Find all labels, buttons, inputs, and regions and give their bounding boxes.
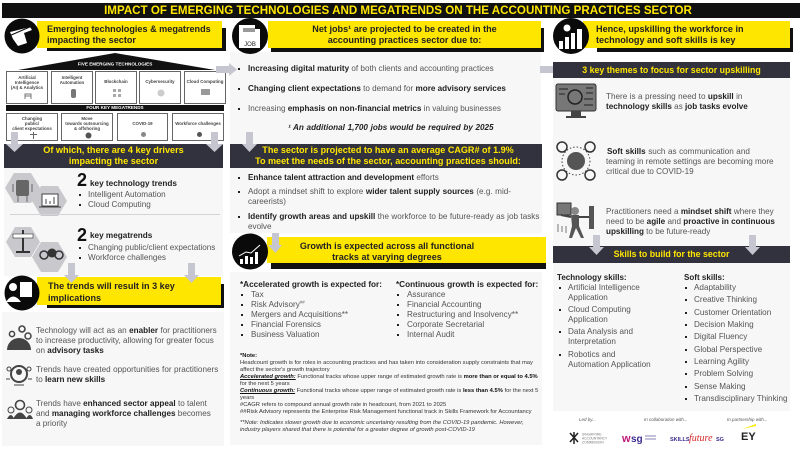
- header: net jobs: Net jobs¹ are projected to be created in the: [312, 24, 497, 34]
- logo: EY: [741, 424, 756, 443]
- technology boxes: (AI) & Analytics: [11, 85, 43, 90]
- arrow: down to growth: [268, 233, 282, 253]
- banner: 3 key themes: [553, 62, 790, 78]
- growth lists: *Accelerated growth is expected for:: [240, 280, 382, 289]
- logo: SkillsFuture SG: SG: [716, 437, 724, 443]
- footer: partner logos: [570, 417, 768, 445]
- growth lists: Risk Advisory##: [251, 299, 305, 309]
- technology boxes: Intelligence: [15, 80, 39, 85]
- action list: Enhance talent attraction and development efforts: [248, 173, 439, 182]
- implications list: a priority: [36, 419, 67, 428]
- technology boxes: Artificial: [18, 75, 36, 80]
- icon: gauge and gears: [7, 325, 32, 350]
- technology boxes: Automation: [60, 80, 84, 85]
- soft skills list: Global Perspective: [694, 345, 762, 354]
- net jobs reasons: Increasing emphasis on non-financial metrics in valuing businesses: [248, 104, 501, 113]
- footer: partner logos: Led by...: [579, 417, 596, 422]
- icon: learner: [6, 365, 32, 386]
- header: 3 key implications: implications: [48, 292, 101, 302]
- panel: left background: [4, 168, 223, 276]
- growth lists: Financial Accounting: [407, 300, 482, 309]
- implications list: [6, 325, 218, 428]
- text: technology upskilling: technology skills as job tasks evolve: [606, 102, 748, 111]
- text: 2 key megatrends: key megatrends: [90, 231, 152, 240]
- megatrend boxes: COVID-19: [132, 121, 153, 126]
- megatrend boxes: & offshoring: [74, 126, 100, 131]
- header: 3 key implications: The trends will result in 3 key: [48, 281, 175, 291]
- technology skills list: Application: [568, 315, 608, 324]
- bar: four key megatrends: FOUR KEY MEGATRENDS: [86, 105, 144, 110]
- footer: partner logos: In partnership with...: [727, 417, 768, 422]
- header: upskilling: technology and soft skills is key: [596, 35, 735, 45]
- technology skills list: Artificial Intelligence: [568, 283, 640, 292]
- header: emerging technologies: Emerging technologies & megatrends: [47, 24, 211, 34]
- logo: WSG: [621, 433, 656, 445]
- note text: **Note: Indicates slower growth due to economic uncertainty resulting from the COVID-19 pandemic. However,: [240, 420, 524, 426]
- text: technology upskilling: [606, 92, 748, 111]
- text: mindset shift: need to be agile and proactive in continuous: [606, 217, 775, 226]
- logo: WSG: sg: [631, 434, 643, 445]
- text: 2 key megatrends: [77, 225, 215, 262]
- action list: evolve: [248, 222, 272, 231]
- megatrend boxes: client expectations: [12, 126, 52, 131]
- icon: monitor: [556, 84, 596, 118]
- banner: CAGR: To meet the needs of the sector, accounting practices should:: [255, 156, 521, 166]
- banner: CAGR: [230, 144, 542, 168]
- header: growth: tracks at varying degrees: [332, 252, 442, 262]
- soft skills list: Transdisciplinary Thinking: [694, 394, 787, 403]
- note text: Continuous growth: Functional tracks whose upper range of estimated growth rate is less than 4.5% for the next 5: [240, 388, 538, 394]
- panel: net jobs background: [230, 52, 541, 144]
- arrows: down to skills: [589, 235, 760, 255]
- header: net jobs: accounting practices sector due to:: [328, 35, 481, 45]
- soft skills list: [684, 273, 787, 403]
- logo: SkillsFuture SG: SKILLS: [670, 437, 690, 443]
- technology boxes: Cloud Computing: [187, 79, 223, 84]
- megatrend boxes: towards outsourcing: [65, 121, 109, 126]
- growth lists: Restructuring and Insolvency**: [407, 310, 518, 319]
- growth lists: Corporate Secretarial: [407, 320, 484, 329]
- action list: careerists): [248, 197, 286, 206]
- implications list: Trends have created opportunities for practitioners: [36, 365, 218, 374]
- text: 2 key megatrends: 2: [77, 225, 87, 245]
- net jobs reasons: [238, 64, 506, 132]
- footer: partner logos: In collaboration with...: [644, 417, 688, 422]
- text: mindset shift: upskilling to be future-ready: [606, 227, 710, 236]
- technology skills list: [557, 273, 651, 369]
- note text: Accelerated growth: Functional tracks whose upper range of estimated growth rate is more than or equal to 4.5%: [240, 374, 538, 380]
- banner: skills to build: Skills to build for the sector: [614, 249, 729, 259]
- technology boxes: Intelligent: [62, 75, 82, 80]
- action list: Identify growth areas and upskill the workforce to be future-ready as job tasks: [248, 212, 539, 221]
- text: mindset shift: Practitioners need a mindset shift where they: [606, 207, 774, 216]
- net jobs reasons: Increasing digital maturity of both clients and accounting practices: [248, 64, 494, 73]
- panel: growth background: [230, 272, 542, 445]
- text: soft skills: Soft skills such as communication and: [607, 147, 750, 156]
- logo: SkillsFuture SG: future: [689, 433, 713, 444]
- logo: WSG: w: [621, 433, 631, 445]
- technology skills list: Cloud Computing: [568, 305, 631, 314]
- banner: CAGR: The sector is projected to have an average CAGR# of 1.9%: [262, 145, 514, 155]
- soft skills list: Soft skills:: [684, 273, 725, 282]
- icon: signpost and people hexagons: [6, 227, 67, 272]
- soft skills list: Problem Solving: [694, 369, 753, 378]
- logo: SkillsFuture SG: [670, 433, 724, 444]
- header: 3 key implications: [4, 276, 224, 310]
- banner: 4 key drivers: [4, 144, 223, 168]
- roof: five emerging technologies: [18, 53, 215, 70]
- logo: Singapore Accountancy Commission: COMMISSION: [582, 440, 604, 444]
- soft skills list: Learning Agility: [694, 357, 749, 366]
- note text: #CAGR refers to compound annual growth rate in headcount, from 2021 to 2025: [240, 402, 446, 408]
- action list: Adopt a mindset shift to explore wider talent supply sources (e.g. mid-: [248, 187, 511, 196]
- text: 2 key technology trends: 2: [77, 170, 87, 190]
- banner: skills to build: [553, 246, 790, 263]
- header: growth: Growth is expected across all functional: [300, 241, 474, 251]
- arrow: down to CAGR: [242, 132, 257, 152]
- growth lists: Business Valuation: [251, 330, 320, 339]
- text: soft skills: critical due to COVID-19: [606, 167, 694, 176]
- implications list: to learn new skills: [36, 375, 105, 384]
- growth lists: Assurance: [407, 290, 445, 299]
- text: 2 key technology trends: Cloud Computing: [88, 200, 151, 209]
- title bar: IMPACT OF EMERGING TECHNOLOGIES AND MEGATRENDS ON THE ACCOUNTING PRACTICES SECTOR: [104, 4, 692, 17]
- banner: 4 key drivers: Of which, there are 4 key drivers: [43, 145, 184, 155]
- header: net jobs: [232, 18, 544, 54]
- icon: global team: [556, 141, 596, 181]
- implications list: on advisory tasks: [36, 346, 104, 355]
- banner: 3 key themes: 3 key themes to focus for sector upskilling: [582, 65, 761, 75]
- header: growth: [232, 234, 546, 270]
- growth lists: Financial Forensics: [251, 320, 321, 329]
- soft skills list: Sense Making: [694, 382, 746, 391]
- note text: *Note:: [240, 353, 257, 359]
- technology skills list: Data Analysis and: [568, 327, 633, 336]
- note text: affect the sector's growth trajectory: [240, 367, 330, 373]
- soft skills list: Adaptability: [694, 283, 736, 292]
- logo: Singapore Accountancy Commission: [570, 432, 608, 444]
- arrow: middle to right: [540, 66, 553, 73]
- growth lists: Internal Audit: [407, 330, 454, 339]
- text: soft skills: teaming in remote settings are becoming more: [606, 157, 774, 166]
- technology skills list: Robotics and: [568, 350, 615, 359]
- implications list: and managing workforce challenges becomes: [36, 409, 211, 418]
- title bar: [2, 3, 800, 18]
- growth lists: *Continuous growth is expected for:: [396, 280, 538, 289]
- text: mindset shift: [606, 207, 775, 236]
- arrows: down to implications: [64, 263, 199, 283]
- note text: [240, 353, 538, 433]
- panel: skills background: [553, 263, 790, 411]
- bar: four key megatrends: [6, 105, 224, 111]
- implications list: to increase productivity, allowing for greater focus: [36, 336, 214, 345]
- header: upskilling: Hence, upskilling the workforce in: [596, 24, 744, 34]
- text: 2 key technology trends: [77, 170, 177, 209]
- note text: industry players shared that there is potential for a greater degree of growth post-COVID-19: [240, 427, 475, 433]
- icon: robot and laptop hexagons: [5, 173, 67, 216]
- action list: [238, 173, 540, 231]
- megatrend boxes: [6, 113, 224, 141]
- arrow: left to middle: [216, 63, 237, 76]
- panel: implications background: [2, 312, 224, 446]
- text: 2 key megatrends: Workforce challenges: [88, 253, 166, 262]
- note text: ##Risk Advisory represents the Enterprise Risk Management functional track in Skills Framework for Accountancy: [240, 409, 532, 415]
- text: 2 key megatrends: Changing public/client expectations: [88, 243, 215, 252]
- text: soft skills: [606, 147, 774, 176]
- technology skills list: Interpretation: [568, 337, 616, 346]
- panel: themes background: [553, 78, 790, 246]
- technology boxes: Blockchain: [104, 79, 128, 84]
- technology boxes: Cybersecurity: [145, 79, 175, 84]
- roof: five emerging technologies: FIVE EMERGING TECHNOLOGIES: [78, 62, 152, 66]
- megatrend boxes: Changing: [22, 116, 42, 121]
- text: 2 key technology trends: key technology trends: [90, 179, 177, 188]
- technology skills list: Automation Application: [568, 360, 651, 369]
- icon: practitioner with book and pencil: [556, 202, 594, 238]
- panel: actions background: [230, 168, 542, 233]
- growth lists: [240, 280, 538, 339]
- net jobs reasons: Changing client expectations to demand for more advisory services: [248, 84, 506, 93]
- soft skills list: Digital Fluency: [694, 332, 747, 341]
- logo: Singapore Accountancy Commission: ACCOUNTANCY: [582, 436, 608, 440]
- logo: EY: EY: [741, 431, 756, 443]
- technology skills list: Application: [568, 293, 608, 302]
- net jobs reasons: ¹ An additional 1,700 jobs would be required by 2025: [288, 123, 494, 132]
- header: emerging technologies: [4, 18, 226, 54]
- arrows: down to drivers: [6, 132, 223, 152]
- megatrend boxes: Move: [81, 116, 93, 121]
- note text: years: [240, 395, 254, 401]
- header: net jobs: JOB: [244, 42, 256, 48]
- technology boxes: [6, 71, 226, 104]
- technology skills list: Technology skills:: [557, 273, 627, 282]
- header: upskilling: [553, 18, 793, 54]
- soft skills list: Creative Thinking: [694, 295, 757, 304]
- text: 2 key technology trends: Intelligent Automation: [88, 190, 166, 199]
- logo: Singapore Accountancy Commission: SINGAPORE: [582, 432, 602, 436]
- soft skills list: Decision Making: [694, 320, 754, 329]
- icon: talent group: [7, 400, 33, 419]
- text: technology upskilling: There is a pressing need to upskill in: [606, 92, 742, 101]
- note text: Headcount growth is for roles in accounting practices and has taken into consideration supply constraints that may: [240, 360, 533, 366]
- soft skills list: Customer Orientation: [694, 308, 771, 317]
- megatrend boxes: public/: [25, 121, 39, 126]
- implications list: Technology will act as an enabler for practitioners: [36, 326, 217, 335]
- growth lists: Tax: [251, 290, 264, 299]
- banner: 4 key drivers: impacting the sector: [69, 156, 158, 166]
- growth lists: Mergers and Acquisitions**: [251, 310, 348, 319]
- divider: [10, 214, 220, 215]
- megatrend boxes: Workforce challenges: [175, 121, 221, 126]
- note text: for the next 5 years: [240, 381, 290, 387]
- implications list: Trends have enhanced sector appeal to talent: [36, 399, 207, 408]
- header: emerging technologies: impacting the sector: [47, 35, 136, 45]
